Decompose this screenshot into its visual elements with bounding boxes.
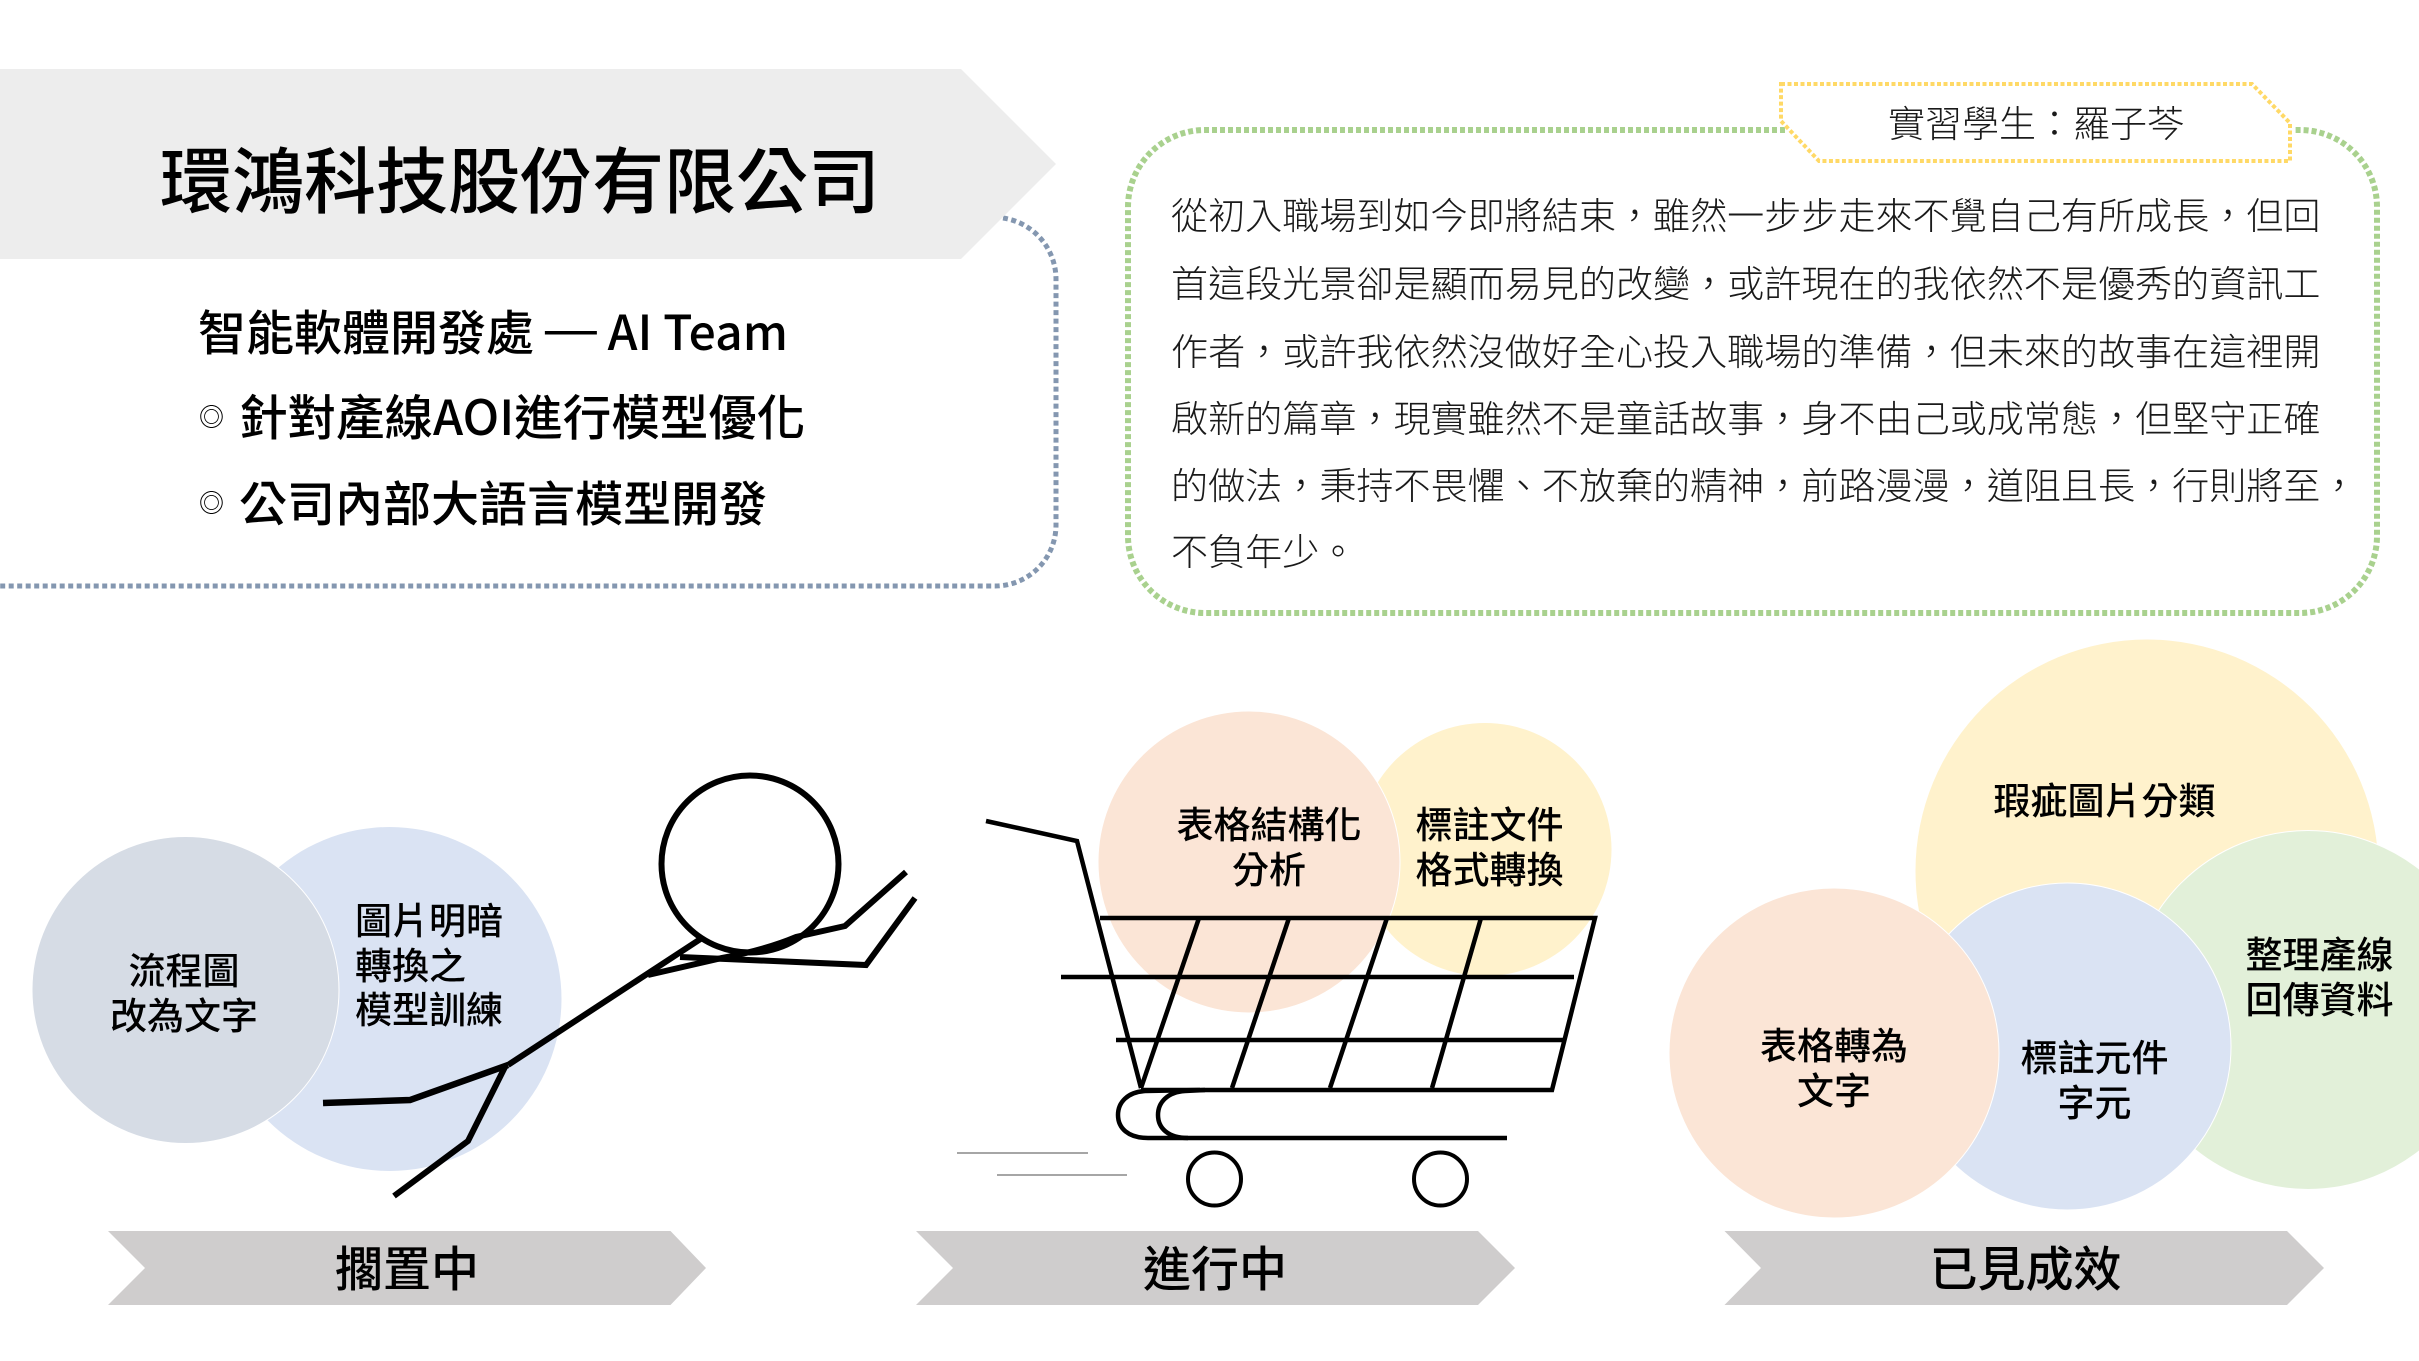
text block: team and duties <box>198 294 805 535</box>
group: achieved bubbles: 標註元件 <box>2020 1028 2168 1082</box>
name tag: intern student <box>1781 84 2290 161</box>
text block: reflection paragraph: 啟新的篇章，現實雖然不是童話故事，身不由己或成常態，但堅守正確 <box>1171 389 2320 443</box>
text block: team and duties: 智能軟體開發處 — AI Team <box>198 294 788 364</box>
text block: team and duties: ◎ <box>199 398 224 434</box>
group: achieved bubbles: 表格轉為 <box>1760 1016 1908 1070</box>
group: on-hold bubbles: 轉換之 <box>355 936 466 990</box>
group: on-hold bubbles: 模型訓練 <box>355 980 503 1034</box>
stage arrow: in progress: 進行中 <box>1143 1230 1287 1300</box>
group: achieved bubbles: 字元 <box>2058 1073 2132 1127</box>
text block: team and duties: ◎ <box>199 484 224 520</box>
text block: reflection paragraph: 首這段光景卻是顯而易見的改變，或許現在的我依然不是優秀的資訊工 <box>1171 254 2320 308</box>
group: achieved bubbles: 整理產線 <box>2246 925 2394 979</box>
text block: reflection paragraph: 不負年少。 <box>1171 522 1356 576</box>
group: on-hold bubbles: 圖片明暗 <box>355 891 503 945</box>
stage arrow: on hold: 擱置中 <box>335 1230 479 1300</box>
stage arrow: achieved <box>1724 1230 2324 1305</box>
title banner: 環鴻科技股份有限公司 <box>160 124 880 228</box>
group: achieved bubbles <box>1669 640 2419 1218</box>
panel: reflection dotted outline <box>1128 130 2377 613</box>
title banner <box>0 69 1056 259</box>
text block: reflection paragraph: 的做法，秉持不畏懼、不放棄的精神，前路漫漫，道阻且長，行則將至， <box>1171 456 2358 510</box>
text block: reflection paragraph <box>1171 186 2358 576</box>
group: on-hold bubbles: 流程圖 <box>128 941 240 995</box>
icon: speed lines <box>957 1153 1127 1175</box>
text block: reflection paragraph: 作者，或許我依然沒做好全心投入職場的準備，但未來的故事在這裡開 <box>1171 322 2320 376</box>
stage arrow: achieved: 已見成效 <box>1929 1230 2122 1300</box>
stage arrow: on hold <box>108 1230 706 1305</box>
text block: team and duties: 公司內部大語言模型開發 <box>239 465 767 535</box>
group: achieved bubbles: 文字 <box>1797 1061 1871 1115</box>
group: on-hold bubbles: 改為文字 <box>110 986 258 1040</box>
icon: shopping cart <box>986 821 1595 1206</box>
stage arrow: in progress <box>916 1230 1515 1305</box>
icon: stick figure pushing cart <box>323 776 915 1196</box>
group: in-progress bubbles: 標註文件 <box>1416 795 1564 849</box>
group: in-progress bubbles <box>1098 711 1612 1013</box>
group: in-progress bubbles: 表格結構化 <box>1176 795 1362 849</box>
panel: company info dotted outline <box>0 218 1056 586</box>
text block: team and duties: 針對產線AOI進行模型優化 <box>239 379 805 449</box>
group: in-progress bubbles: 分析 <box>1232 840 1306 894</box>
group: on-hold bubbles <box>32 827 562 1171</box>
group: in-progress bubbles: 格式轉換 <box>1416 840 1564 894</box>
group: achieved bubbles: 瑕疵圖片分類 <box>1994 771 2216 825</box>
text block: reflection paragraph: 從初入職場到如今即將結束，雖然一步步走來不覺自己有所成長，但回 <box>1171 186 2320 240</box>
name tag: intern student: 實習學生：羅子芩 <box>1888 94 2184 148</box>
group: achieved bubbles: 回傳資料 <box>2246 970 2394 1024</box>
